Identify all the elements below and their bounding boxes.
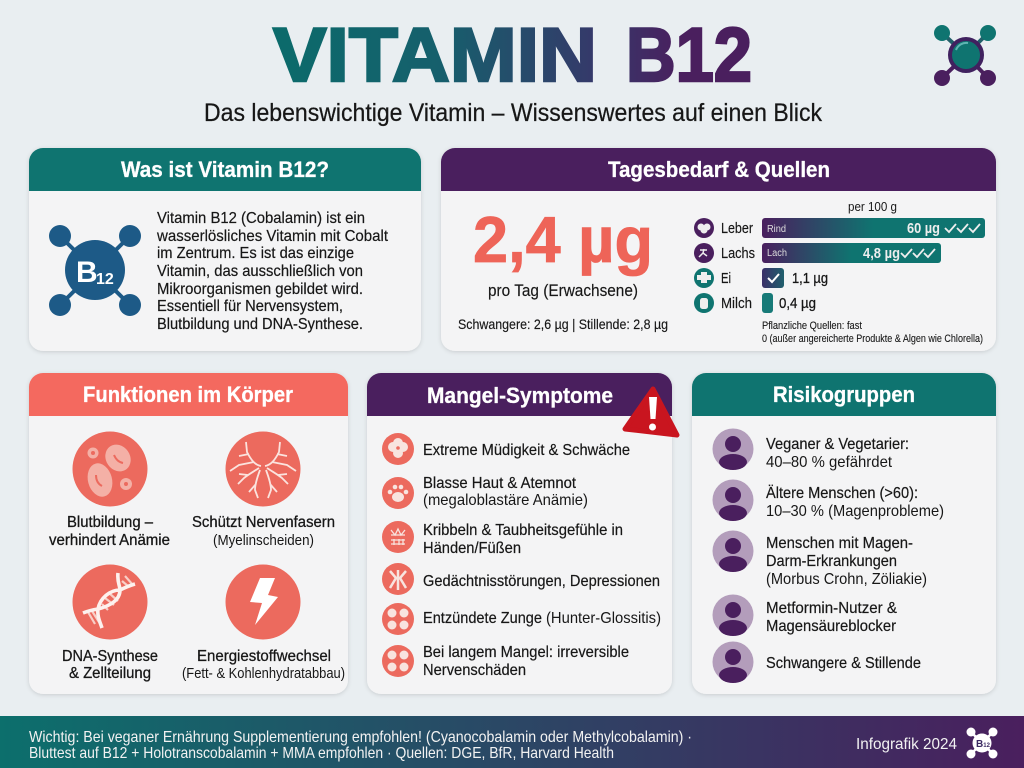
risk group 3: (Morbus Crohn, Zöliakie)	[766, 571, 927, 588]
row: Milch: Milch	[721, 295, 752, 312]
risk group 2: 10–30 % (Magenprobleme)	[766, 503, 944, 520]
row: Leber: Leber	[721, 220, 753, 237]
panel: Tagesbedarf und Quellen	[441, 148, 996, 351]
risk group 1: 40–80 % gefährdet	[766, 454, 893, 471]
header: Funktionen im Körper	[29, 373, 348, 416]
symptom 5	[382, 603, 661, 635]
description text: Blutbildung und DNA-Synthese.	[157, 316, 363, 333]
symptom 2: Blasse Haut & Atemnot	[423, 475, 577, 492]
symptom 5: Entzündete Zunge	[423, 610, 542, 627]
symptom 6: Nervenschäden	[423, 662, 526, 679]
symptom 3	[382, 521, 623, 557]
header: Tagesbedarf und Quellen: Tagesbedarf & Quellen	[608, 157, 830, 182]
symptom 2	[382, 475, 588, 509]
symptom 6: Bei langem Mangel: irreversible	[423, 644, 629, 661]
icon: lightning bolt	[226, 564, 300, 640]
risk group 3: Menschen mit Magen-	[766, 535, 913, 552]
icon: molecule top right	[934, 25, 996, 86]
row: Leber: Rind	[767, 224, 786, 235]
title	[273, 13, 752, 98]
row: Ei	[694, 268, 828, 288]
label: DNA-Synthese	[62, 648, 158, 682]
label: Energiestoffwechsel: Energiestoffwechsel	[197, 648, 331, 665]
row: Ei: 1,1 µg	[792, 270, 828, 287]
description text: Vitamin, das ausschließlich von	[157, 263, 363, 280]
header: Was ist Vitamin B12	[29, 148, 421, 191]
symptom 1: Extreme Müdigkeit & Schwäche	[423, 442, 630, 459]
label: Energiestoffwechsel	[182, 648, 345, 682]
icon: B12 molecule: 12	[96, 271, 114, 288]
row: Lachs: 4,8 µg	[863, 245, 900, 262]
description text: Mikroorganismen gebildet wird.	[157, 281, 363, 298]
label: DNA-Synthese: DNA-Synthese	[62, 648, 158, 665]
footer label: Infografik 2024	[856, 736, 957, 753]
panel: Mangel-Symptome	[367, 373, 677, 694]
footer note: Wichtig: Bei veganer Ernährung Supplementierung empfohlen! (Cyanocobalamin oder Methylcobalamin) ·	[29, 729, 692, 746]
row: Lachs	[694, 243, 941, 263]
label: DNA-Synthese: & Zellteilung	[69, 665, 151, 682]
label: Nervenfasern	[192, 514, 335, 549]
icon: DNA	[72, 564, 148, 640]
label: Blutbildung: verhindert Anämie	[49, 532, 170, 549]
label: Nervenfasern: (Myelinscheiden)	[213, 532, 314, 549]
description text: wasserlösliches Vitamin mit Cobalt	[156, 228, 389, 245]
label: Energiestoffwechsel: (Fett- & Kohlenhydratabbau)	[182, 665, 345, 682]
label: Nervenfasern: Schützt Nervenfasern	[192, 514, 335, 531]
header: Risikogruppen: Risikogruppen	[773, 382, 915, 407]
icon: warning triangle	[625, 389, 677, 435]
risk group 3	[712, 530, 927, 588]
symptom 3: Kribbeln & Taubheitsgefühle in	[423, 522, 623, 539]
title: VITAMIN	[273, 13, 597, 98]
header: Mangel-Symptome: Mangel-Symptome	[427, 383, 613, 408]
label: Blutbildung: Blutbildung –	[67, 514, 153, 531]
risk group 1	[712, 428, 909, 471]
symptom 3: Händen/Füßen	[423, 540, 521, 557]
icon: blood cells	[72, 432, 148, 506]
description text: im Zentrum. Es ist das einzige	[157, 245, 354, 262]
symptom 6	[382, 644, 629, 679]
symptom 4: Gedächtnisstörungen, Depressionen	[423, 573, 660, 590]
icon: B12 molecule: B	[76, 256, 98, 289]
header: Risikogruppen	[692, 373, 996, 416]
risk group 4	[712, 594, 897, 636]
icon: B12 molecule	[49, 225, 141, 316]
risk group 2: Ältere Menschen (>60):	[766, 484, 918, 502]
footer note	[29, 729, 692, 762]
daily dose: 2,4 µg	[473, 203, 653, 276]
panel: Was ist Vitamin B12	[29, 148, 421, 351]
dose caption: pro Tag (Erwachsene)	[488, 282, 638, 300]
row: Leber	[694, 218, 985, 238]
panel: Funktionen im Körper	[29, 373, 348, 694]
risk group 1: Veganer & Vegetarier:	[766, 436, 909, 453]
symptom 2: (megaloblastäre Anämie)	[423, 492, 588, 509]
footer note: Bluttest auf B12 + Holotranscobalamin + MMA empfohlen · Quellen: DGE, BfR, Harvard Health	[29, 745, 614, 762]
risk group 5	[712, 642, 921, 683]
header: Tagesbedarf und Quellen	[441, 148, 996, 191]
per 100 g: per 100 g	[848, 199, 897, 214]
row: Lachs: Lach	[767, 248, 787, 259]
pregnancy note: Schwangere: 2,6 µg | Stillende: 2,8 µg	[458, 316, 668, 332]
icon: nerve fibres	[226, 432, 300, 506]
description text: Essentiell für Nervensystem,	[157, 298, 343, 315]
icon: footer molecule	[966, 728, 998, 758]
symptom 5: (Hunter-Glossitis)	[546, 610, 661, 627]
plant sources note: Pflanzliche Quellen: fast	[762, 320, 862, 332]
row: Ei: Ei	[721, 270, 731, 287]
risk group 2	[712, 480, 944, 521]
footer	[0, 716, 1024, 768]
icon: footer molecule: B12	[976, 739, 991, 750]
subtitle: Das lebenswichtige Vitamin – Wissenswertes auf einen Blick	[204, 99, 822, 127]
header: Mangel-Symptome	[367, 373, 672, 416]
risk group 4: Metformin-Nutzer &	[766, 600, 897, 617]
risk group 3: Darm-Erkrankungen	[766, 553, 897, 570]
symptom 1	[382, 433, 630, 465]
row: Milch: 0,4 µg	[779, 295, 816, 312]
panel: Risikogruppen	[692, 373, 996, 694]
label: Blutbildung	[49, 514, 170, 549]
row: Milch	[694, 293, 816, 313]
header: Was ist Vitamin B12: Was ist Vitamin B12?	[121, 157, 329, 182]
description text	[156, 210, 389, 333]
description text: Vitamin B12 (Cobalamin) ist ein	[157, 210, 365, 227]
risk group 5: Schwangere & Stillende	[766, 655, 921, 672]
symptom 4	[382, 563, 660, 595]
row: Leber: 60 µg	[907, 220, 940, 237]
risk group 4: Magensäureblocker	[766, 618, 897, 635]
plant sources note: 0 (außer angereicherte Produkte & Algen wie Chlorella)	[762, 333, 983, 345]
title: B12	[626, 13, 752, 98]
plant sources note	[762, 320, 983, 345]
row: Lachs: Lachs	[721, 245, 755, 262]
header: Funktionen im Körper: Funktionen im Körper	[83, 382, 293, 407]
